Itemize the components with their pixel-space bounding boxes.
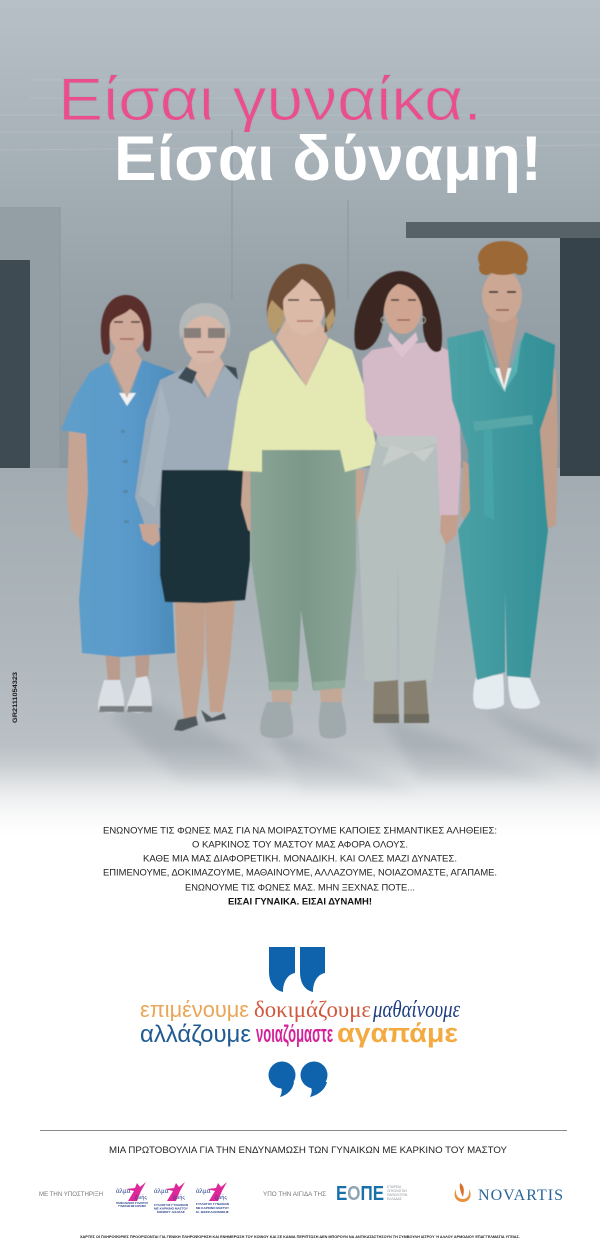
- woman with grey hair and dark skirt: [135, 303, 250, 731]
- vertical code: GR2111054323: [12, 672, 19, 723]
- title: pink line: Είσαι γυναίκα.: [58, 66, 482, 133]
- logo: alma zois 2: ΝΟΜΟΥ ΑΧΑΪΑΣ: [157, 1210, 185, 1214]
- woman in teal jumpsuit: [447, 241, 558, 709]
- logo: alma zois 1: ζωής: [135, 1194, 147, 1201]
- logo: alma zois 3: ΣΥΛΛΟΓΟΣ ΓΥΝΑΙΚΩΝ: [196, 1202, 229, 1206]
- logo: EOPE: ΕΤΑΙΡΕΙΑ: [387, 1185, 402, 1189]
- logo: alma zois 3: [196, 1182, 229, 1214]
- right awning: [406, 222, 600, 238]
- logo: alma zois 1: άλμα: [116, 1187, 131, 1195]
- logo: alma zois 3: άλμα: [196, 1187, 211, 1195]
- title: white line: Είσαι δύναμη!: [114, 124, 542, 194]
- closing quote mark: [268, 1062, 328, 1097]
- initiative line: ΜΙΑ ΠΡΩΤΟΒΟΥΛΙΑ ΓΙΑ ΤΗΝ ΕΝΔΥΝΑΜΩΣΗ ΤΩΝ ΓΥΝΑΙΚΩΝ ΜΕ ΚΑΡΚΙΝΟ ΤΟΥ ΜΑΣΤΟΥ: [109, 1145, 508, 1156]
- logo: EOPE: ΕΛΛΑΔΑΣ: [387, 1197, 402, 1201]
- woman in pink top and light trousers: [354, 271, 461, 723]
- body text: ΕΝΩΝΟΥΜΕ ΤΙΣ ΦΩΝΕΣ ΜΑΣ ΓΙΑ ΝΑ ΜΟΙΡΑΣΤΟΥΜΕ ΚΑΠΟΙΕΣ ΣΗΜΑΝΤΙΚΕΣ ΑΛΗΘΕΙΕΣ:: [103, 826, 497, 836]
- woman in green trousers and yellow cardigan: [228, 264, 379, 738]
- logo: alma zois 2: [154, 1182, 188, 1214]
- footer disclaimer: ΧΑΡΤΕΣ ΟΙ ΠΛΗΡΟΦΟΡΙΕΣ ΠΡΟΟΡΙΖΟΝΤΑΙ ΓΙΑ ΓΕΝΙΚΗ ΠΛΗΡΟΦΟΡΗΣΗ ΚΑΙ ΕΝΗΜΕΡΩΣΗ ΤΟΥ ΚΟΙΝΟΥ ΚΑΙ ΣΕ ΚΑΜΙΑ ΠΕΡΙΠΤΩΣΗ ΔΕΝ ΜΠΟΡΟΥΝ ΝΑ ΑΝΤΙΚΑΤΑΣΤΗΣΟΥΝ ΤΗ ΣΥΜΒΟΥΛΗ ΙΑΤΡΟΥ Ή ΑΛΛΟΥ ΑΡΜΟΔΙΟΥ ΕΠΑΓΓΕΛΜΑΤΙΑ ΥΓΕΙΑΣ.: [80, 1235, 520, 1239]
- logo: alma zois 1: [116, 1182, 148, 1208]
- logo: alma zois 2: ζωής: [173, 1194, 185, 1201]
- logo words line one: [140, 997, 460, 1023]
- logo: Novartis: [455, 1183, 563, 1204]
- left door: [0, 260, 30, 468]
- logo: EOPE: ΟΓΚΟΛΟΓΩΝ: [387, 1189, 407, 1193]
- logo: Novartis: NOVARTIS: [478, 1187, 563, 1204]
- support label: ΜΕ ΤΗΝ ΥΠΟΣΤΗΡΙΞΗ: [39, 1192, 103, 1198]
- logo: alma zois 3: ΜΕ ΚΑΡΚΙΝΟ ΜΑΣΤΟΥ: [196, 1206, 229, 1210]
- logo words line two: αλλάζουμε: [140, 1021, 251, 1048]
- body text: ΕΝΩΝΟΥΜΕ ΤΙΣ ΦΩΝΕΣ ΜΑΣ. ΜΗΝ ΞΕΧΝΑΣ ΠΟΤΕ...: [185, 882, 415, 892]
- logo: alma zois 2: ΜΕ ΚΑΡΚΙΝΟ ΜΑΣΤΟΥ: [154, 1206, 188, 1210]
- logo: alma zois 1: ΠΑΝΕΛΛΗΝΙΟΣ ΣΥΛΛΟΓΟΣ: [116, 1201, 148, 1205]
- logo: alma zois 3: Ν. ΘΕΣΣΑΛΟΝΙΚΗΣ: [196, 1210, 229, 1214]
- logo: alma zois 1: ΓΥΝΑΙΚΩΝ ΜΕ ΚΑΡΚΙΝΟ: [118, 1204, 146, 1208]
- logo words line two: νοιαζόμαστε: [256, 1021, 333, 1048]
- body text: [103, 826, 497, 906]
- body text: ΕΠΙΜΕΝΟΥΜΕ, ΔΟΚΙΜΑΖΟΥΜΕ, ΜΑΘΑΙΝΟΥΜΕ, ΑΛΛΑΖΟΥΜΕ, ΝΟΙΑΖΟΜΑΣΤΕ, ΑΓΑΠΑΜΕ.: [103, 868, 497, 878]
- woman in blue dress: [61, 295, 176, 713]
- logo words line one: μαθαίνουμε: [372, 997, 460, 1023]
- logo words line one: δοκιμάζουμε: [254, 997, 371, 1022]
- logo: alma zois 3: ζωής: [215, 1194, 227, 1201]
- logo words line two: αγαπάμε: [337, 1018, 458, 1048]
- logo words line one: επιμένουμε: [140, 997, 249, 1022]
- body text: Ο ΚΑΡΚΙΝΟΣ ΤΟΥ ΜΑΣΤΟΥ ΜΑΣ ΑΦΟΡΑ ΟΛΟΥΣ.: [192, 840, 408, 850]
- photo: five women standing: [61, 241, 558, 738]
- logo words line two: [140, 1018, 458, 1048]
- logo: EOPE: ΠΑΘΟΛΟΓΩΝ: [387, 1193, 408, 1197]
- body text: ΚΑΘΕ ΜΙΑ ΜΑΣ ΔΙΑΦΟΡΕΤΙΚΗ. ΜΟΝΑΔΙΚΗ. ΚΑΙ ΟΛΕΣ ΜΑΖΙ ΔΥΝΑΤΕΣ.: [143, 854, 457, 864]
- patronage label: ΥΠΟ ΤΗΝ ΑΙΓΙΔΑ ΤΗΣ: [263, 1192, 326, 1198]
- body text: ΕΙΣΑΙ ΓΥΝΑΙΚΑ. ΕΙΣΑΙ ΔΥΝΑΜΗ!: [228, 896, 372, 906]
- opening quote mark: [269, 947, 325, 992]
- logo: alma zois 2: ΣΥΛΛΟΓΟΣ ΓΥΝΑΙΚΩΝ: [154, 1203, 188, 1207]
- logo: alma zois 2: άλμα: [154, 1187, 169, 1195]
- right door: [560, 238, 600, 476]
- ground shadows: [110, 700, 600, 790]
- logo: EOPE: ΕΟΠΕ: [336, 1183, 384, 1205]
- fade to white: [0, 745, 600, 840]
